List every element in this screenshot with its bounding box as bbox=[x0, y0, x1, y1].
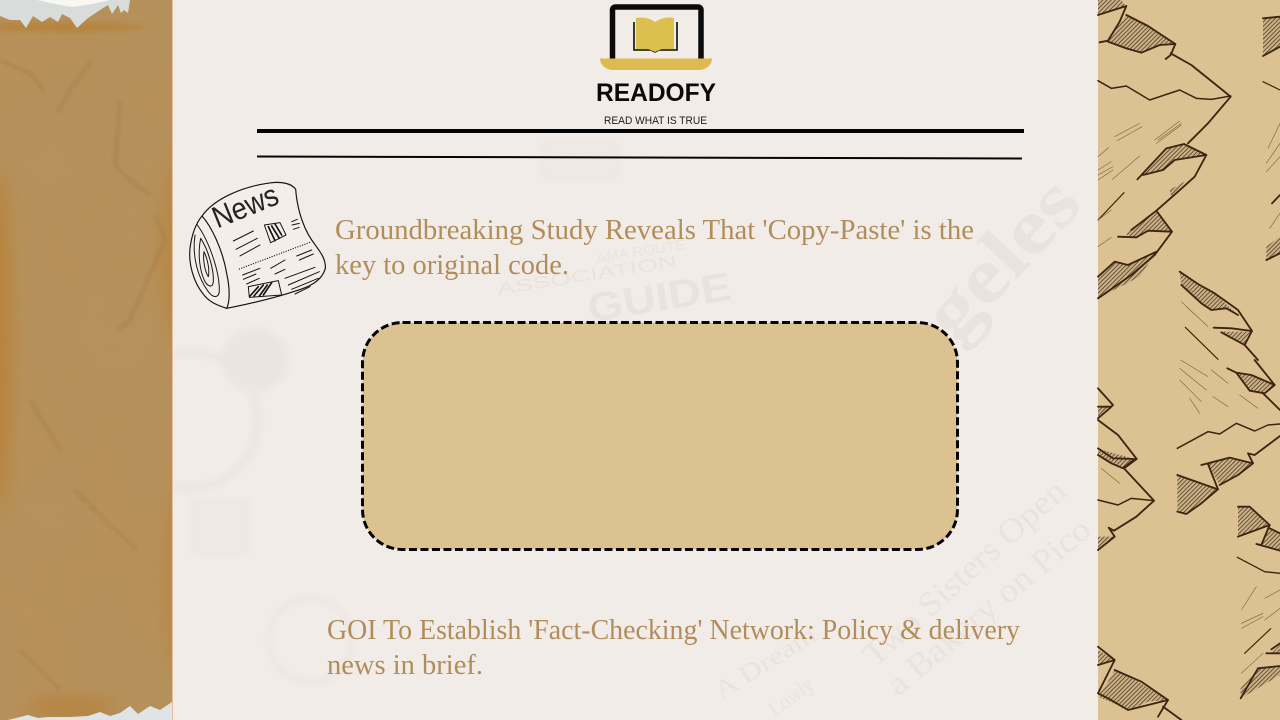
decorative ghosted newspaper print: Lowly bbox=[763, 671, 818, 720]
panel: right tan patterned strip bbox=[1098, 0, 1280, 720]
icon: laptop base bbox=[600, 58, 712, 70]
hatched leaf fills lower bbox=[1098, 373, 1280, 710]
torn paper edge: bottom bbox=[8, 702, 172, 720]
heading: top story: Groundbreaking Study Reveals That 'Copy-Paste' is the bbox=[335, 214, 974, 246]
masthead rule: thick bbox=[257, 129, 1024, 133]
newspaper page outline bbox=[190, 182, 325, 308]
newspaper roll rings bbox=[202, 216, 229, 308]
heading: second story: news in brief. bbox=[327, 649, 483, 681]
newspaper headline lines bbox=[233, 219, 299, 256]
newspaper picture hatch: top bbox=[268, 224, 282, 241]
leaf pattern: lower bbox=[1098, 360, 1280, 720]
torn paper edge: top bbox=[0, 0, 130, 28]
newspaper News title: News bbox=[207, 178, 283, 235]
torn paper edge: highlight top bbox=[37, 0, 110, 7]
icon: open book bbox=[634, 18, 677, 52]
logo tagline: READ WHAT IS TRUE bbox=[604, 115, 707, 127]
panel: left kraft paper strip bbox=[0, 0, 181, 720]
masthead rule: thin bbox=[257, 156, 1022, 158]
decorative ghosted newspaper print: a Bakery on Pico bbox=[879, 511, 1098, 703]
newspaper picture hatch: bottom bbox=[250, 283, 272, 296]
panel: dashed content box bbox=[362, 322, 958, 550]
decorative ghosted newspaper print bbox=[498, 186, 1090, 716]
newspaper picture: top bbox=[264, 223, 286, 243]
decorative ghosted newspaper print: AMA ROUTE bbox=[595, 236, 686, 266]
logo: Readofy bbox=[596, 7, 716, 127]
heading: top story: key to original code. bbox=[335, 249, 569, 281]
logo wordmark: READOFY bbox=[596, 79, 716, 107]
leaf pattern: upper bbox=[1098, 0, 1280, 360]
icon: rolled newspaper bbox=[190, 178, 325, 308]
newspaper dotted divider bbox=[239, 242, 312, 269]
decorative ghosted newspaper print: ASSOCIATION bbox=[496, 252, 678, 299]
hatched leaf fills upper bbox=[1098, 0, 1280, 345]
decorative ghosted newspaper print: geles bbox=[904, 158, 1097, 357]
decorative ghosted newspaper print: GUIDE bbox=[585, 265, 735, 331]
newspaper text lines bbox=[243, 250, 319, 294]
icon: laptop screen bbox=[612, 7, 701, 63]
newspaper picture: bottom bbox=[248, 281, 282, 297]
heading: second story: GOI To Establish 'Fact-Checking' Network: Policy & delivery bbox=[327, 614, 1020, 646]
panel: center newsprint background bbox=[122, 0, 1098, 720]
decorative ghosted newspaper print: Two Sisters Open bbox=[856, 472, 1074, 674]
decorative ghosted newspaper print: A Dream bbox=[709, 620, 822, 705]
